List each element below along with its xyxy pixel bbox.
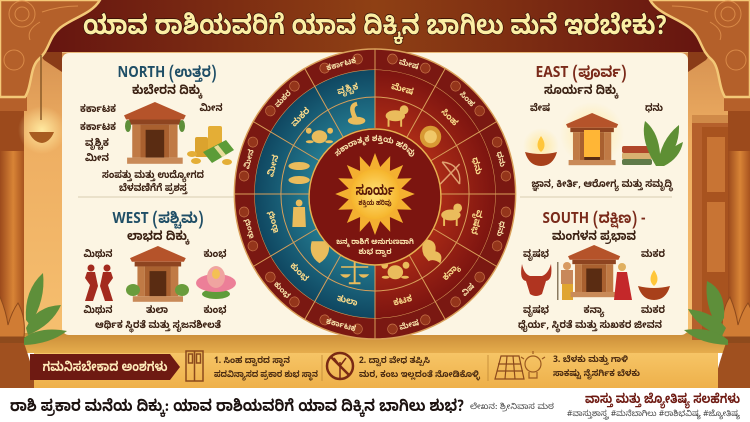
footer headline: ರಾಶಿ ಪ್ರಕಾರ ಮನೆಯ ದಿಕ್ಕು: ಯಾವ ರಾಶಿಯವರಿಗೆ ಯಾವ ದಿಕ್ಕಿನ ಬಾಗಿಲು ಶುಭ? (10, 398, 464, 420)
panel: east (523, 64, 683, 193)
tips heading banner (30, 354, 180, 380)
left beam (38, 52, 62, 72)
panel: north (80, 64, 234, 197)
tip 3 text (553, 355, 640, 381)
north description: ಬೆಳವಣಿಗೆಗೆ ಪ್ರಶಸ್ತ (119, 182, 187, 197)
west sign labels: ತುಲಾ (146, 304, 168, 319)
icon: lotus (196, 266, 236, 299)
tip 1 text (214, 356, 318, 382)
middle ring sign labels: ಮೀನ (265, 153, 283, 179)
hanging lamp (18, 55, 66, 154)
icon: east temple with sun rays (560, 102, 624, 166)
middle ring sign labels: ವೃಶ್ಚಿಕ (336, 81, 360, 99)
icon: libra scales (340, 259, 369, 284)
icon: hanging leaves (125, 120, 185, 132)
south sign labels: ವೃಷಭ (523, 304, 549, 319)
icon: human figure (292, 199, 306, 227)
icon: cancer crab red side (381, 262, 409, 279)
icon: west temple door (130, 246, 186, 302)
sun (335, 153, 415, 235)
icon: male deity figure (557, 262, 573, 300)
north sign labels: ಮೀನ (200, 102, 223, 117)
icon: palm leaves (644, 121, 683, 166)
icon: glowing lamp (523, 128, 559, 166)
icon: cancer crab (306, 128, 333, 143)
icon: sagittarius bow (440, 162, 460, 184)
outer ring sign labels: ಮೇಷ (398, 318, 421, 335)
outer ring sign labels (242, 57, 506, 336)
middle ring sign labels (265, 81, 485, 311)
centre caption: ಶುಭ ದ್ವಾರ (359, 248, 391, 258)
icon: aquarius pot (311, 241, 329, 263)
north heading: NORTH (ಉತ್ತರ) (118, 64, 216, 86)
middle ring sign labels: ಧನು (467, 156, 484, 176)
teal half (255, 70, 375, 318)
tip 2 text: 2. ದ್ವಾರ ವೇಧ ತಪ್ಪಿಸಿ (359, 356, 431, 368)
zodiac wheel (234, 48, 516, 340)
icon: capricorn (422, 239, 441, 263)
centre caption: ಜನ್ಮ ರಾಶಿಗೆ ಅನುಗುಣವಾಗಿ (336, 238, 414, 248)
north description (102, 169, 204, 197)
north sign labels (80, 102, 223, 167)
hashtags: #ವಾಸ್ತುಶಾಸ್ತ್ರ #ಮನೆಬಾಗಿಲು #ರಾಶಿಭವಿಷ್ಯ #ಜ್ಯೋತಿಷ್ಯ (567, 409, 741, 421)
north sign labels: ವೃಶ್ಚಿಕ (85, 137, 110, 152)
west sign labels: ಕುಂಭ (204, 304, 227, 319)
east subheading: ಸೂರ್ಯನ ದಿಕ್ಕು (544, 84, 619, 101)
north subheading: ಕುಬೇರನ ದಿಕ್ಕು (132, 83, 203, 101)
east sign labels: ಧನು (645, 102, 663, 117)
right beam (688, 52, 712, 72)
west sign labels (84, 248, 227, 319)
north sign labels: ಮೀನ (85, 152, 109, 167)
outer ring sign labels: ಕರ್ಕಾಟಕ (326, 57, 358, 75)
icon: potted plants (126, 284, 189, 296)
tip 1 text: 1. ಸಿಂಹ ದ್ವಾರದ ಸ್ಥಾನ (214, 356, 290, 368)
south sign labels: ಕನ್ಯಾ (584, 304, 605, 319)
icon: female deity figure (614, 263, 632, 300)
icon: oil lamp (638, 270, 670, 300)
title band (40, 0, 710, 52)
tip 2 text: ಮರ, ಕಂಬ ಇಲ್ಲದಂತೆ ನೋಡಿಕೊಳ್ಳಿ (359, 370, 481, 382)
south sign labels: ಮಕರ (641, 248, 665, 263)
panel: west (84, 210, 236, 334)
west description: ಆರ್ಥಿಕ ಸ್ಥಿರತೆ ಮತ್ತು ಸೃಜನಶೀಲತೆ (95, 319, 221, 334)
south sign labels: ವೃಷಭ (523, 248, 549, 263)
tip 2 text (359, 356, 481, 382)
icon: bull head (521, 264, 551, 296)
icon: leo lion (420, 126, 441, 148)
floor (0, 333, 750, 353)
right ornate arch (650, 0, 750, 97)
south description: ಧೈರ್ಯ, ಸ್ಥಿರತೆ ಮತ್ತು ಸುಖಕರ ಜೀವನ (518, 319, 662, 334)
centre disc (309, 129, 441, 265)
outer ring sign labels: ಮೀನ (242, 148, 259, 171)
icon: north temple door (124, 102, 186, 164)
icon: taurus ram (441, 203, 462, 226)
north sign labels: ಕರ್ಕಾಟಕ (80, 103, 117, 118)
icon: gemini twins (85, 264, 113, 301)
left pillar (0, 97, 34, 388)
east description: ಜ್ಞಾನ, ಕೀರ್ತಿ, ಆರೋಗ್ಯ ಮತ್ತು ಸಮೃದ್ಧಿ (532, 178, 674, 193)
outer ring sign labels: ಧನು (492, 219, 506, 237)
south sign labels: ಮಕರ (641, 304, 665, 319)
middle ring sign labels: ಕುಂಭ (286, 260, 311, 285)
west sign labels: ಮಿಥುನ (84, 248, 113, 263)
outer ring sign labels: ಸಿಂಹ (456, 90, 476, 111)
tip 1 text: ಪದವಿನ್ಯಾಸದ ಪ್ರಕಾರ ಶುಭ ಸ್ಥಾನ (214, 369, 318, 382)
left ornate arch (0, 0, 100, 97)
south sign labels (523, 248, 665, 319)
right pillar (716, 97, 750, 388)
outer ring sign labels: ಕುಂಭ (270, 279, 292, 302)
outer ring sign labels: ಮೇಷ (397, 57, 420, 74)
icon: scorpio (348, 102, 365, 125)
west sign labels: ಮಿಥುನ (84, 304, 113, 319)
icon: door (186, 351, 203, 381)
outer ring (234, 49, 516, 339)
middle ring sign labels: ಮಕರ (289, 105, 314, 131)
west heading: WEST (ಪಶ್ಚಿಮ) (112, 210, 204, 232)
outer ring sign labels: ಮಕರ (273, 89, 295, 111)
tips heading: ಗಮನಿಸಬೇಕಾದ ಅಂಶಗಳು (42, 360, 168, 379)
west sign labels: ಕುಂಭ (204, 248, 227, 263)
title: ಯಾವ ರಾಶಿಯವರಿಗೆ ಯಾವ ದಿಕ್ಕಿನ ಬಾಗಿಲು ಮನೆ ಇರಬೇಕು? (83, 12, 667, 49)
middle ring sign labels: ಕುಂಭ (265, 209, 283, 234)
east sign labels: ವೇಷ (530, 102, 550, 117)
west subheading: ಲಾಭದ ದಿಕ್ಕು (127, 230, 190, 247)
north sign labels: ಕರ್ಕಾಟಕ (80, 121, 117, 136)
zodiac icons (288, 102, 462, 284)
sun label: ಸೂರ್ಯ (356, 183, 394, 203)
middle ring sign labels: ವೃಷಭ (466, 208, 485, 236)
middle ring sign labels: ತುಲಾ (335, 293, 359, 311)
middle ring sign labels: ಮೇಷ (389, 81, 415, 100)
sun sublabel: ಶಕ್ತಿಯ ಹರಿವು (359, 199, 391, 209)
icon: light bulb (521, 351, 545, 378)
outer ring sign labels: ಕುಂಭ (242, 217, 259, 240)
main cream panel (62, 53, 688, 335)
panel: south (518, 210, 670, 334)
south subheading: ಮಂಗಳನ ಪ್ರಭಾವ (552, 230, 636, 247)
icon: books (622, 146, 652, 165)
arc text: positive energy flow: ಸಕಾರಾತ್ಮಕ ಶಕ್ತಿಯ ಹರಿವು (334, 134, 414, 157)
outer ring sign labels: ಧನು (492, 151, 506, 169)
icon: coins and money (187, 126, 234, 165)
outer ring sign labels: ಕರ್ಕಾಟಕ (324, 317, 357, 336)
middle ring sign labels: ಕಟಕ (392, 293, 414, 311)
outer ring sign labels: ವಿಷ (460, 281, 478, 300)
author credit: ಲೇಖನ: ಶ್ರೀನಿವಾಸ ಮಠ (470, 402, 554, 414)
east sign labels (530, 102, 663, 117)
south heading: SOUTH (ದಕ್ಷಿಣ) - (542, 210, 646, 232)
middle ring sign labels: ಕನ್ಯಾ (440, 261, 463, 284)
icon: aries ram (386, 105, 408, 127)
icon: pisces fish (288, 162, 310, 184)
icon: right plant (684, 281, 728, 345)
icon: left plant (24, 273, 67, 345)
east heading: EAST (ಪೂರ್ವ) (536, 64, 626, 86)
middle ring sign labels: ಸಿಂಹ (437, 106, 460, 130)
icon: south temple door (568, 245, 620, 297)
tips band (30, 351, 718, 388)
north description: ಸಂಪತ್ತು ಮತ್ತು ಉದ್ಯೋಗದ (102, 169, 204, 184)
icon: window grid (495, 356, 524, 379)
red half (375, 70, 495, 318)
tip 3 text: ಸಾಕಷ್ಟು ನೈಸರ್ಗಿಕ ಬೆಳಕು (553, 369, 640, 381)
tip 3 text: 3. ಬೆಳಕು ಮತ್ತು ಗಾಳಿ (553, 355, 628, 367)
footer strip (0, 388, 750, 422)
icon: no tree (327, 353, 353, 379)
centre caption (336, 238, 414, 258)
right door (692, 115, 732, 340)
